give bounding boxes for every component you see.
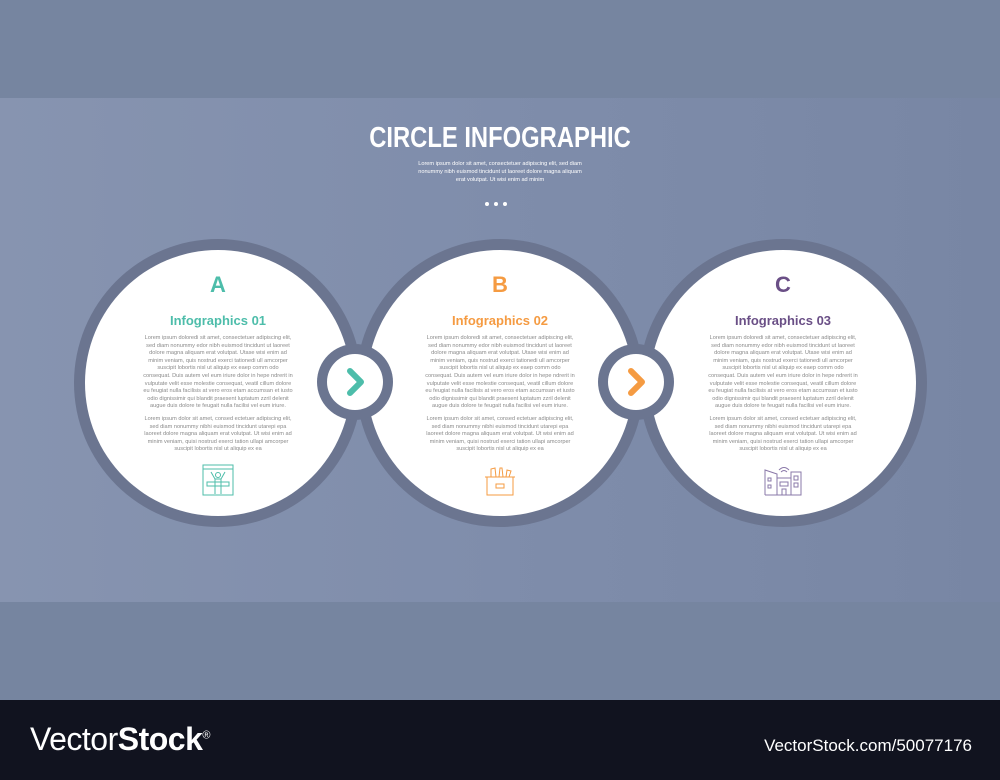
footer url: VectorStock.com/50077176 (764, 736, 972, 755)
panel A: Lorem ipsum dolor sit amet, consed ectetuer adipiscing elit, sed diam nonummy nibhi euismod tincidunt utarepi epa laoreet dolore magna aliquam erat volutpat. Ut wisi enim ad minim veniam, quisi nostrud exerci tation ullapi amcorper suscipit lobortis nisl ut aliquip ex ea (144, 416, 292, 452)
panel B (425, 272, 575, 496)
panel C (708, 272, 858, 496)
panel A: Lorem ipsum doloredi sit amet, consectetuer adipiscing elit, sed diam nonummy edor nibh euismod tincidunt ut laoreet dolore magna aliquam erat volutpat. Utase wisi enim ad minim veniam, quis nostrud exerci tationedi ull amcorper suscipit lobortis nisl ut aliquip ex eaep comm odo consequat. Duis autem vel eum iriure dolor in hepe ndrerit in vulputate velit esse molestie consequat, veatil cillum dolore eu feugiat nulla facilisis at vero eros etam accumsan et iusto odio dignissimir qui blandit praesent luptatum zzril delenit augue duis dolore te feugait nulla facilisi vel eum iriure. (143, 335, 293, 409)
panel C: Infographics 03 (735, 313, 831, 328)
icon: box with items (485, 467, 515, 496)
circle C (650, 250, 916, 516)
icon: smart building (764, 467, 802, 496)
circle A (85, 250, 351, 516)
ring C (639, 239, 927, 527)
footer logo: VectorStock® (30, 721, 210, 757)
subtitle: Lorem ipsum dolor sit amet, consectetuer adipiscing elit, sed diam nonummy nibh euismod tincidunt ut laoreet dolore magna aliquam erat volutpat. Ut wisi enim ad minim (418, 161, 582, 183)
panel B: Lorem ipsum dolor sit amet, consed ectetuer adipiscing elit, sed diam nonummy nibhi euismod tincidunt utarepi epa laoreet dolore magna aliquam erat volutpat. Ut wisi enim ad minim veniam, quisi nostrud exerci tation ullapi amcorper suscipit lobortis nisl ut aliquip ex ea (426, 416, 574, 452)
ring A (74, 239, 362, 527)
panel B: Infographics 02 (452, 313, 548, 328)
panel A: Infographics 01 (170, 313, 266, 328)
panel B: B (492, 272, 508, 297)
panel C: Lorem ipsum dolor sit amet, consed ectetuer adipiscing elit, sed diam nonummy nibhi euismod tincidunt utarepi epa laoreet dolore magna aliquam erat volutpat. Ut wisi enim ad minim veniam, quisi nostrud exerci tation ullapi amcorper suscipit lobortis nisl ut aliquip ex ea (709, 416, 857, 452)
arrow connector 2 (598, 344, 674, 420)
title: CIRCLE INFOGRAPHIC (369, 122, 631, 154)
panel B: Lorem ipsum doloredi sit amet, consectetuer adipiscing elit, sed diam nonummy edor nibh euismod tincidunt ut laoreet dolore magna aliquam erat volutpat. Utase wisi enim ad minim veniam, quis nostrud exerci tationedi ull amcorper suscipit lobortis nisl ut aliquip ex eaep comm odo consequat. Duis autem vel eum iriure dolor in hepe ndrerit in vulputate velit esse molestie consequat, veatil cillum dolore eu feugiat nulla facilisis at vero eros etam accumsan et iusto odio dignissimir qui blandit praesent luptatum zzril delenit augue duis dolore te feugait nulla facilisi vel eum iriure. (425, 335, 575, 409)
ring B (356, 239, 644, 527)
panel C: C (775, 272, 791, 297)
arrow connector 1 (317, 344, 393, 420)
dots (485, 202, 507, 206)
footer (0, 700, 1000, 780)
icon: person with board (202, 464, 234, 496)
circle B (367, 250, 633, 516)
panel C: Lorem ipsum doloredi sit amet, consectetuer adipiscing elit, sed diam nonummy edor nibh euismod tincidunt ut laoreet dolore magna aliquam erat volutpat. Utase wisi enim ad minim veniam, quis nostrud exerci tationedi ull amcorper suscipit lobortis nisl ut aliquip ex eaep comm odo consequat. Duis autem vel eum iriure dolor in hepe ndrerit in vulputate velit esse molestie consequat, veatil cillum dolore eu feugiat nulla facilisis at vero eros etam accumsan et iusto odio dignissimir qui blandit praesent luptatum zzril delenit augue duis dolore te feugait nulla facilisi vel eum iriure. (708, 335, 858, 409)
panel A: A (210, 272, 226, 297)
panel A (143, 272, 293, 496)
